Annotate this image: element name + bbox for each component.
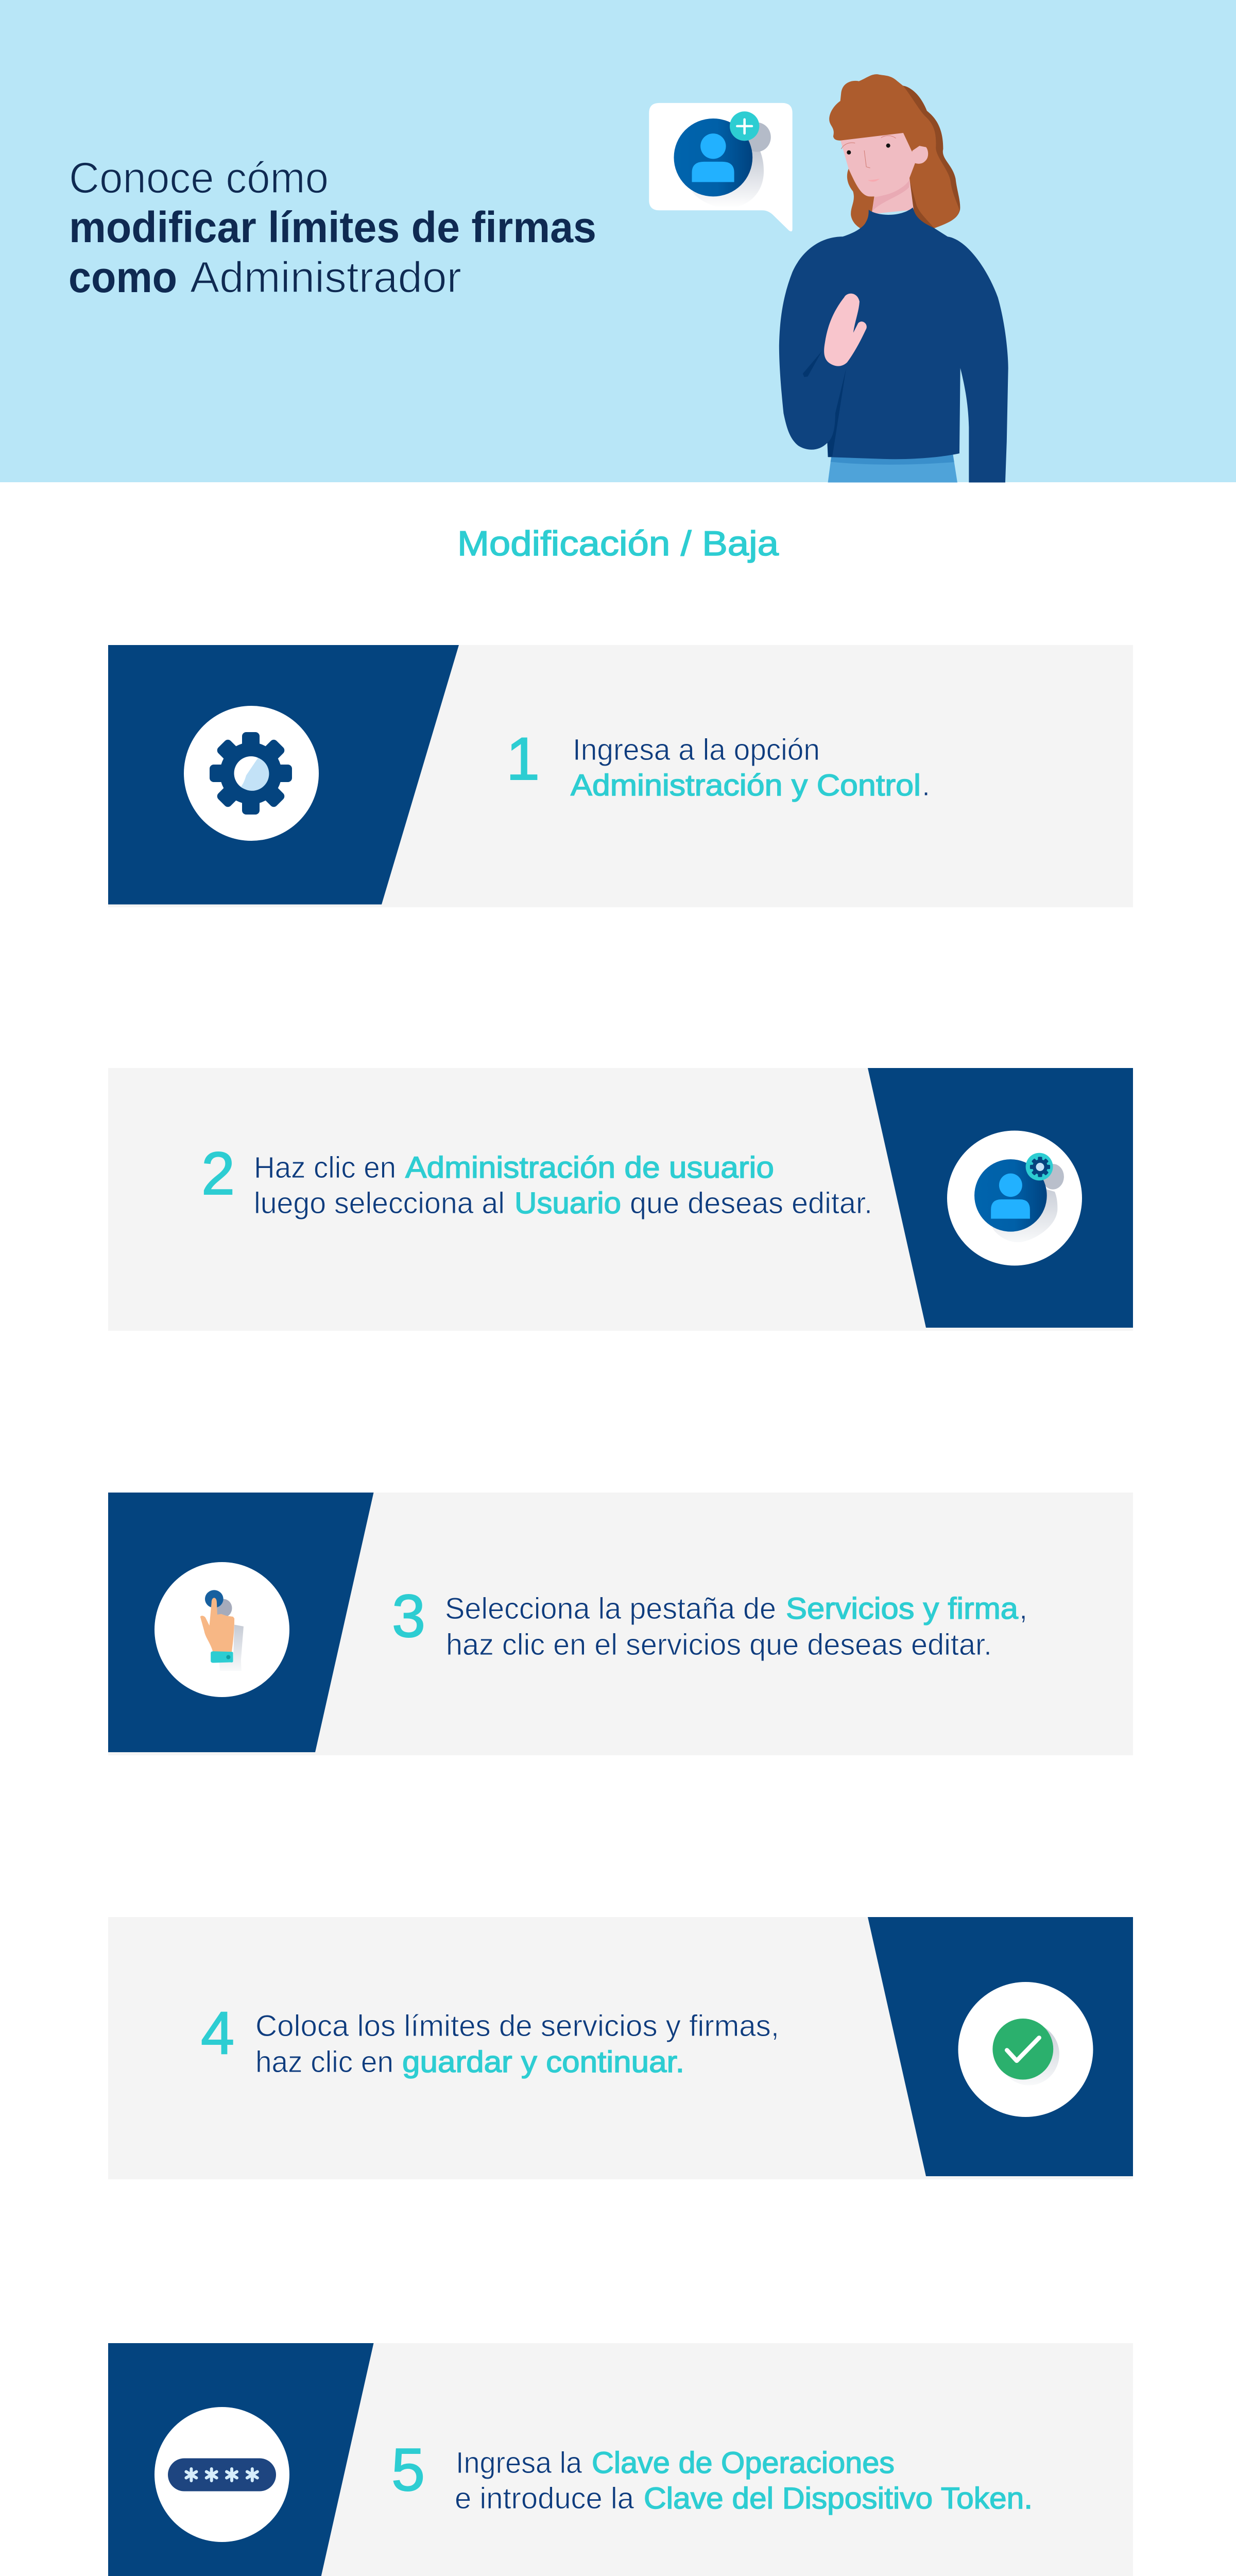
heading: Modificación / Baja: [457, 524, 779, 563]
number 4: 4: [201, 1999, 234, 2066]
card background: [108, 1493, 1133, 1755]
blue block: [868, 1917, 1133, 2176]
title: Administrador: [190, 253, 461, 301]
step text: Ingresa a la opción: [573, 733, 820, 767]
step text: [445, 1592, 1027, 1662]
icon: gear: [184, 706, 319, 841]
step text: Haz clic en: [254, 1151, 396, 1184]
icon: speech bubble with user and plus: [649, 103, 793, 231]
header background: [0, 0, 1236, 482]
hair top: [829, 74, 936, 152]
card background: [108, 1917, 1133, 2179]
hand: [824, 294, 867, 366]
step text: guardar y continuar.: [402, 2045, 684, 2079]
step text: haz clic en: [255, 2045, 393, 2079]
step text: [254, 1151, 872, 1220]
step text: Ingresa la: [456, 2446, 582, 2480]
hair lower left: [847, 169, 878, 229]
icon: hand tapping: [154, 1562, 289, 1697]
step text: Clave del Dispositivo Token.: [644, 2482, 1033, 2515]
number 2: 2: [201, 1140, 235, 1207]
step text: luego selecciona al: [254, 1187, 505, 1220]
blue block: [108, 1493, 374, 1752]
step text: ,: [1019, 1592, 1027, 1625]
face details: [847, 150, 851, 155]
step text: Administración y Control: [571, 769, 921, 802]
icon: user with gear badge: [947, 1130, 1082, 1265]
number 3: 3: [392, 1582, 425, 1650]
step text: que deseas editar.: [630, 1187, 872, 1220]
step text: Administración de usuario: [405, 1151, 774, 1184]
step text: Servicios y firma: [786, 1592, 1019, 1625]
step text: Clave de Operaciones: [592, 2446, 895, 2480]
card background: [108, 1068, 1133, 1331]
step text: [455, 2446, 1033, 2515]
sweater folds: [803, 351, 846, 457]
title: [68, 154, 596, 301]
neck: [871, 176, 914, 214]
panel: step 3: [108, 1493, 1133, 1755]
number 5: 5: [391, 2436, 425, 2503]
panel: step 1: [108, 645, 1133, 907]
illustration: woman: [779, 74, 1008, 482]
title: modificar límites de firmas: [69, 203, 596, 251]
blue block: [108, 645, 459, 905]
step text: [571, 733, 930, 802]
title: como: [68, 253, 177, 301]
jeans: [828, 454, 957, 482]
blue block: [108, 2343, 374, 2576]
step text: [255, 2009, 779, 2079]
card background: [108, 645, 1133, 907]
panel: header: [0, 0, 1236, 482]
number 1: 1: [506, 725, 540, 792]
step text: .: [922, 769, 930, 802]
title: Conoce cómo: [69, 154, 329, 202]
panel: step 5: [108, 2343, 1133, 2576]
step text: Coloca los límites de servicios y firmas,: [255, 2009, 779, 2043]
card background: [108, 2343, 1133, 2576]
step text: haz clic en el servicios que deseas editar.: [446, 1628, 992, 1662]
ear: [911, 144, 928, 164]
step text: e introduce la: [455, 2482, 634, 2515]
panel: step 4: [108, 1917, 1133, 2179]
panel: step 2: [108, 1068, 1133, 1331]
sweater: [779, 208, 1008, 482]
face: [840, 132, 915, 196]
icon: green check: [958, 1982, 1093, 2117]
blue block: [868, 1068, 1133, 1328]
step text: Usuario: [514, 1187, 621, 1220]
icon: password field: [154, 2407, 289, 2542]
hair back: [902, 86, 960, 228]
step text: Selecciona la pestaña de: [445, 1592, 776, 1625]
